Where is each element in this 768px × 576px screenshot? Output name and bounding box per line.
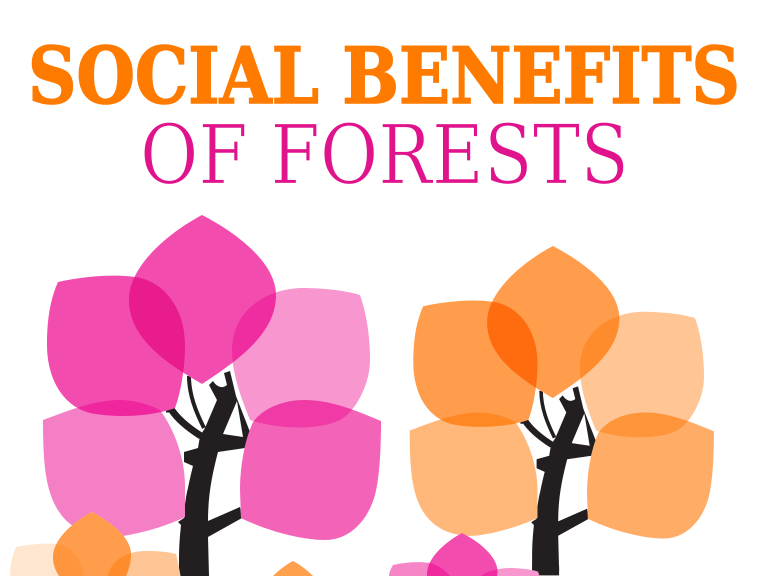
- small orange tree, bottom centre: [273, 561, 313, 576]
- small orange tree, bottom left: [10, 512, 180, 576]
- large orange tree: [410, 246, 714, 575]
- large pink tree: [43, 215, 381, 576]
- subtitle: of Forests: OF FORESTS: [140, 108, 629, 204]
- small pink tree, bottom right: [389, 533, 540, 576]
